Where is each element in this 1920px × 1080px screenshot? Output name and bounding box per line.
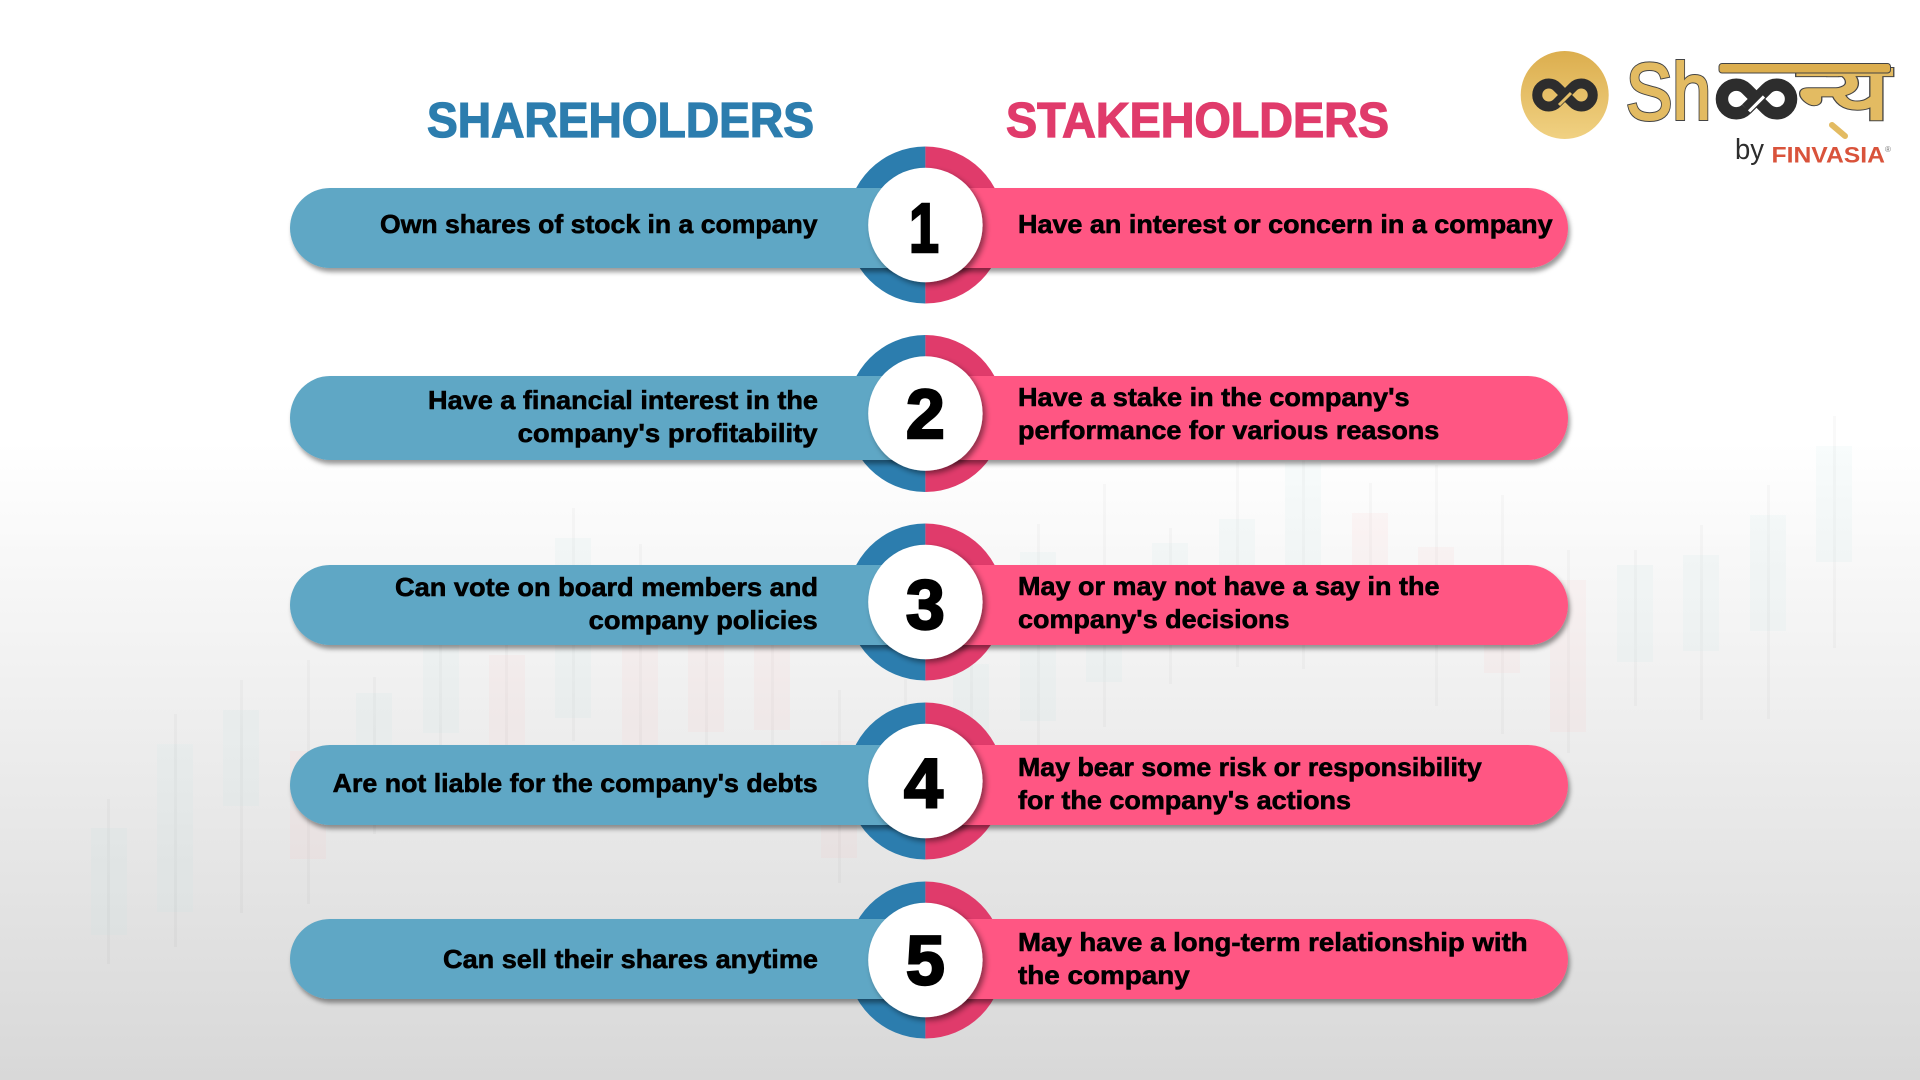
stakeholder text 2 [1018, 382, 1439, 445]
number badge 5: 5 [906, 922, 945, 1000]
shareholder text 4: Are not liable for the company's debts [333, 768, 818, 798]
shareholder text 2: company's profitability [518, 418, 818, 448]
shareholder text 3: Can vote on board members and [395, 572, 818, 602]
row 1 comparison [290, 146, 1568, 304]
wordmark: top bar [1719, 64, 1890, 73]
stakeholder pill 4 [925, 745, 1568, 825]
shareholder pill 1 [290, 188, 930, 268]
shareholder text 5: Can sell their shares anytime [443, 944, 818, 974]
faint candlestick chart background [91, 416, 1852, 964]
stakeholder pill 3 [925, 565, 1568, 645]
number badge 1: 1 [909, 189, 939, 267]
logo: Shoonya by Finvasia [1521, 47, 1892, 168]
shareholder pill 2 [290, 376, 930, 460]
stakeholder text 2: performance for various reasons [1018, 415, 1439, 445]
by label: by [1735, 134, 1764, 166]
wordmark: Devanagari letters: न्य [1798, 47, 1892, 136]
wordmark: lower stroke [1832, 125, 1845, 136]
shareholder text 1: Own shares of stock in a company [380, 209, 818, 239]
shareholder pill 4 [290, 745, 930, 825]
stakeholder pill 5 [925, 919, 1568, 999]
stakeholder text 2: Have a stake in the company's [1018, 382, 1410, 412]
icon: gold circle with infinity [1521, 51, 1609, 139]
shareholder pill 3 [290, 565, 930, 645]
wordmark: Sh: Sh [1626, 47, 1711, 136]
shareholder pill 5 [290, 919, 930, 999]
row 4 comparison [290, 702, 1568, 860]
number badge 3: 3 [906, 566, 945, 644]
wordmark: Sh: Sh [1626, 47, 1711, 136]
number badge 3 [868, 545, 983, 659]
stakeholder text 4: for the company's actions [1018, 785, 1351, 815]
number badge 2 [868, 356, 983, 471]
shareholder text 3 [395, 572, 818, 635]
number badge 1 [868, 168, 983, 282]
stakeholder text 4: May bear some risk or responsibility [1018, 752, 1482, 782]
number badge 4 [868, 724, 983, 838]
row 3 comparison [290, 524, 1568, 680]
stakeholder pill 1 [925, 188, 1568, 268]
heading: stakeholders: STAKEHOLDERS [1006, 94, 1389, 148]
registered mark: ® [1885, 145, 1891, 154]
wordmark: Devanagari letters: न्य [1798, 47, 1892, 136]
number badge 5 [868, 903, 983, 1017]
stakeholder text 3 [1018, 571, 1440, 634]
stakeholder text 5: May have a long-term relationship with [1018, 927, 1528, 957]
stakeholder text 3: company's decisions [1018, 604, 1290, 634]
heading: shareholders: SHAREHOLDERS [427, 94, 814, 148]
row 2 comparison [290, 335, 1568, 492]
Finvasia label: FINVASIA [1772, 142, 1885, 168]
icon: wordmark infinity [1722, 85, 1791, 113]
stakeholder text 3: May or may not have a say in the [1018, 571, 1440, 601]
stakeholder text 4 [1018, 752, 1482, 815]
stakeholder pill 2 [925, 376, 1568, 460]
stakeholder text 5: the company [1018, 960, 1190, 990]
row 5 comparison [290, 882, 1568, 1038]
shareholder text 2: Have a financial interest in the [428, 385, 818, 415]
stakeholder text 1: Have an interest or concern in a company [1018, 209, 1553, 239]
shareholder text 2 [428, 385, 818, 448]
number badge 4: 4 [904, 744, 943, 822]
shareholder text 3: company policies [589, 605, 818, 635]
stakeholder text 5 [1018, 927, 1528, 990]
number badge 2: 2 [906, 375, 945, 453]
